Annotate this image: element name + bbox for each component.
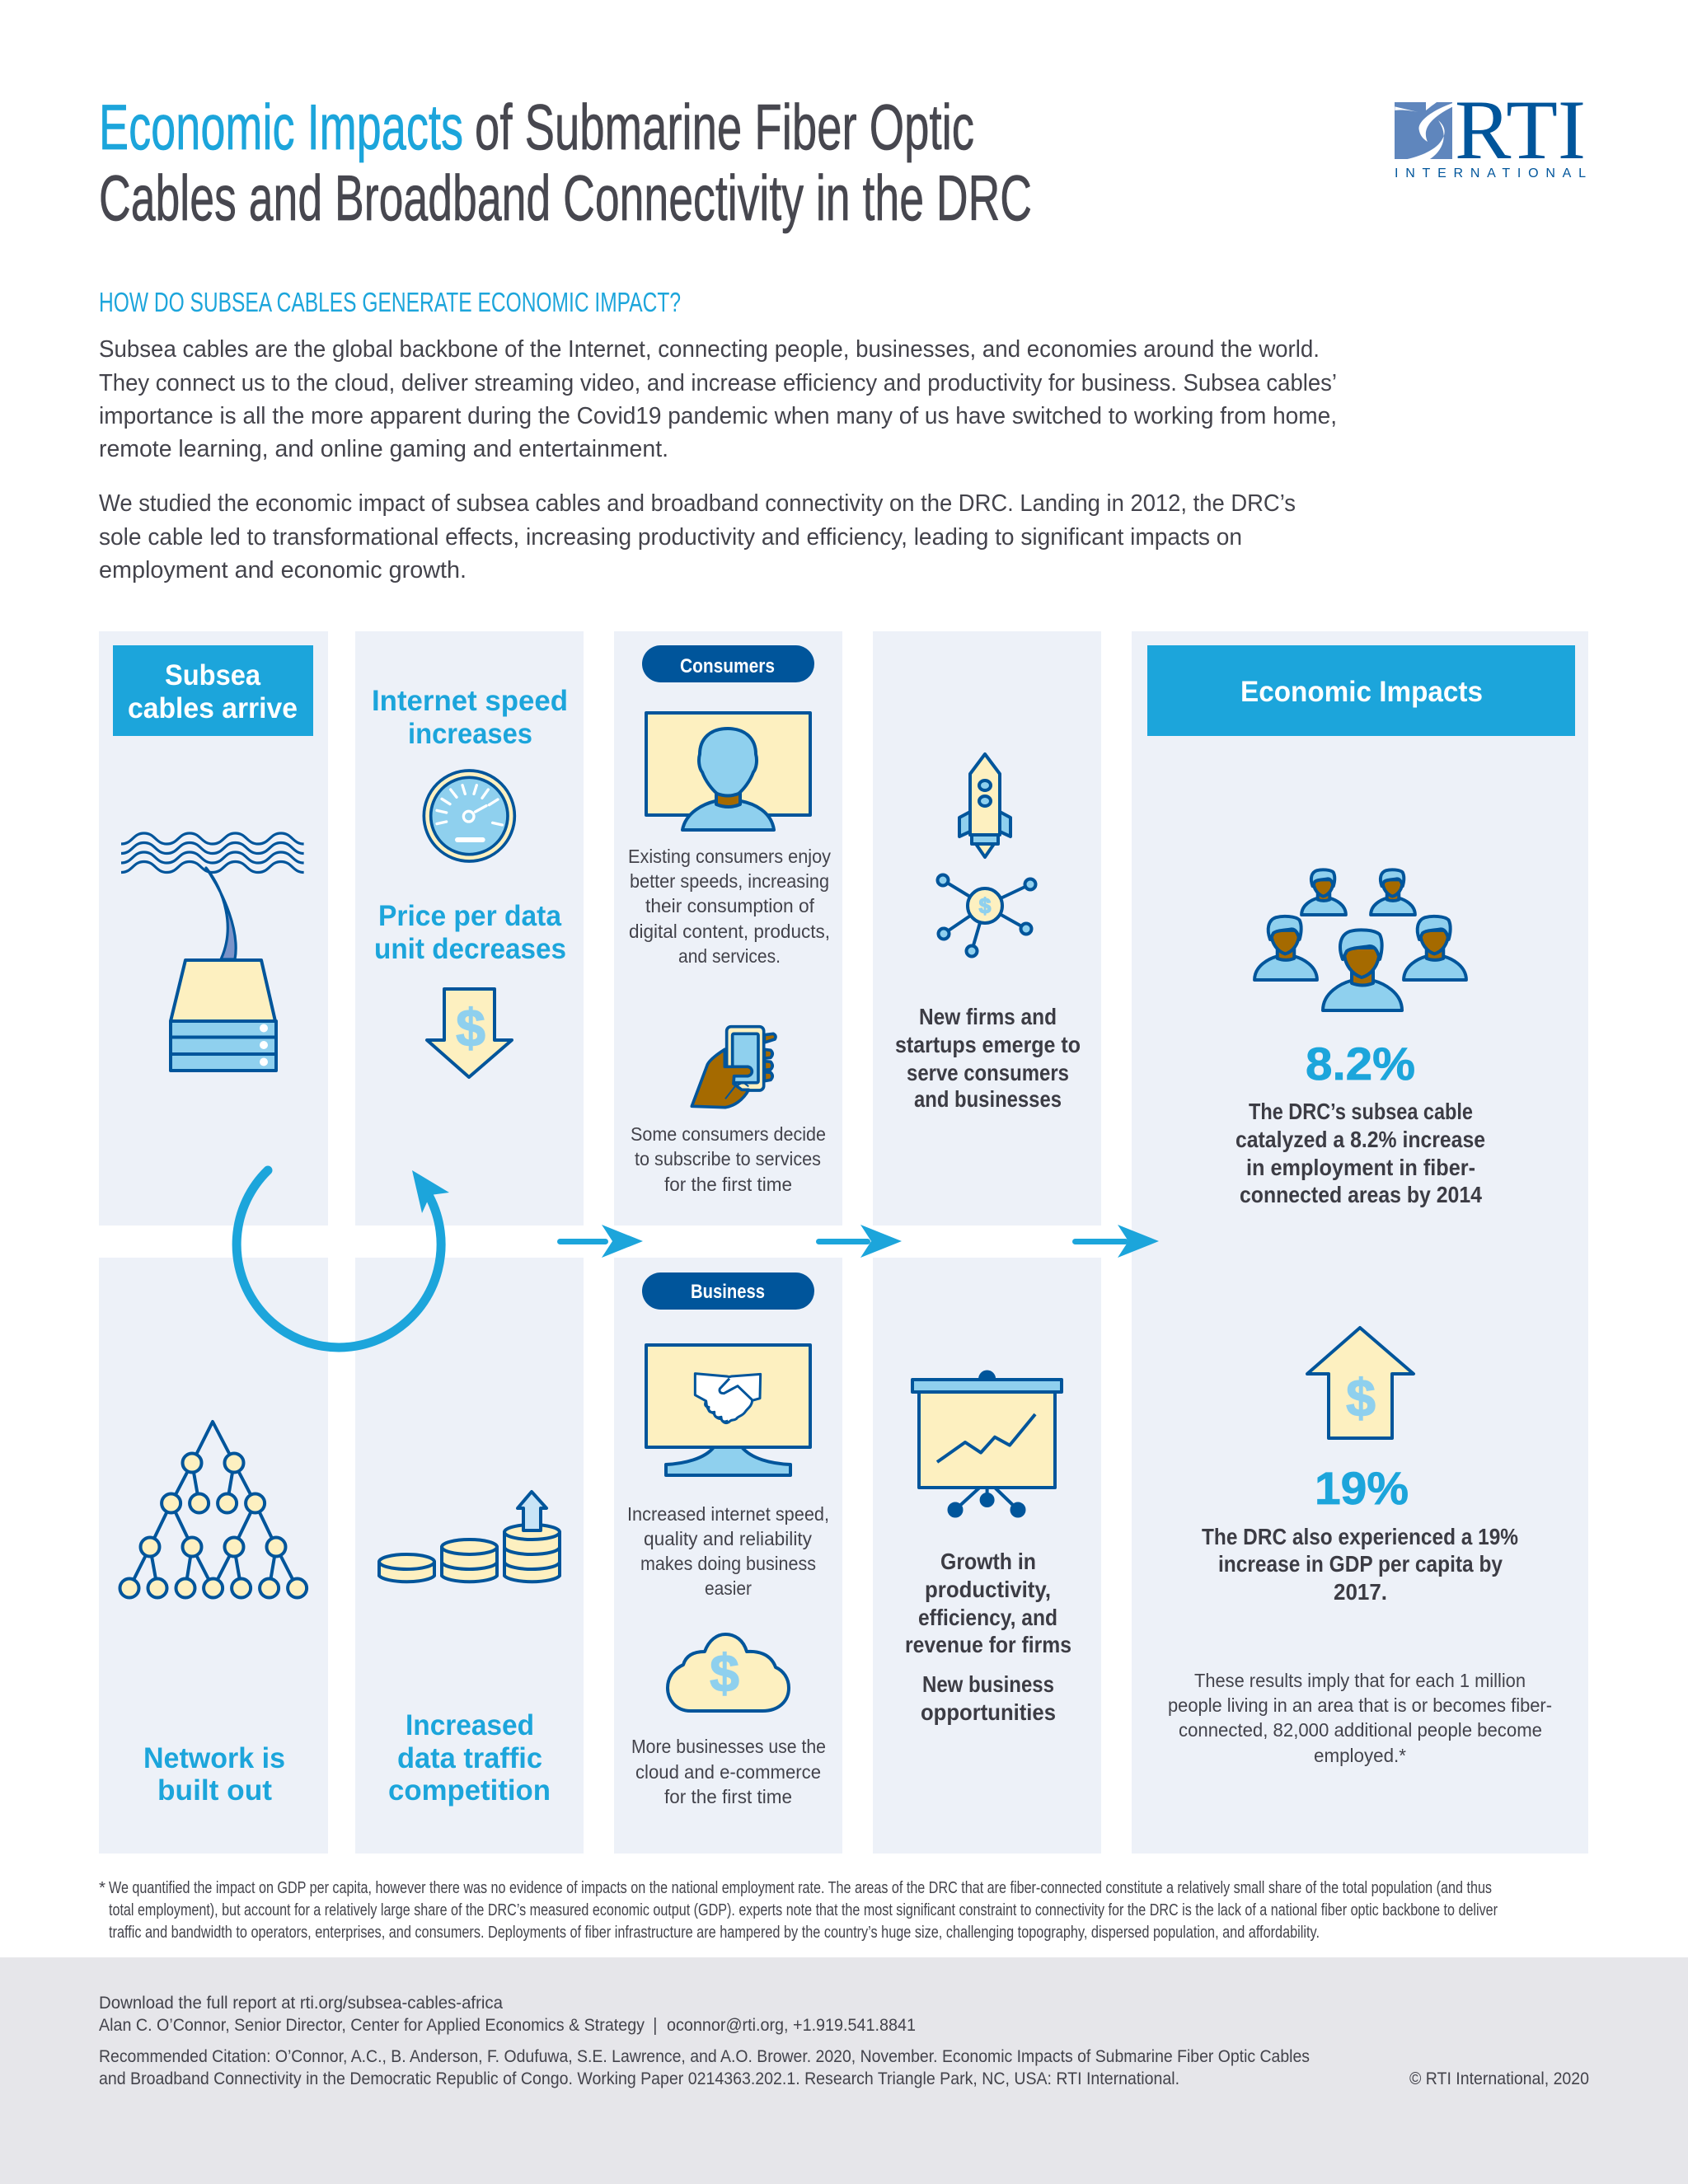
label: price per data unit decreases	[374, 900, 566, 965]
intro paragraph 2: sole cable led to transformational effects, increasing productivity and efficiency, leading to significant impacts on	[99, 524, 1242, 551]
text: implied employment: people living in an area that is or becomes fiber-	[1168, 1694, 1552, 1716]
icon: startup network: $	[979, 893, 992, 918]
panel: internet speed and price	[372, 685, 568, 1077]
intro paragraph 1: They connect us to the cloud, deliver streaming video, and increase efficiency and productivity for business. Subsea cables’	[99, 370, 1337, 396]
text: growth in productivity: productivity,	[925, 1577, 1051, 1602]
icon: ocean waves	[121, 833, 304, 872]
label: price per data unit decreases: Price per data	[378, 900, 562, 932]
text: implied employment	[1168, 1670, 1552, 1766]
header: subsea cables arrive: cables arrive	[128, 692, 298, 724]
icon: cable	[206, 868, 236, 959]
copyright: © RTI International, 2020	[1409, 2069, 1589, 2088]
icon: up arrow with dollar: $	[1346, 1368, 1376, 1427]
panel: consumers	[628, 645, 831, 1195]
contact details: Alan C. O’Connor, Senior Director, Center for Applied Economics & Strategy	[99, 2015, 645, 2035]
text: growth in productivity: efficiency, and	[918, 1605, 1057, 1630]
panel: network is built out	[120, 1422, 307, 1807]
intro paragraph 2: We studied the economic impact of subsea cables and broadband connectivity on the DRC. Landing in 2012, the DRC’s	[99, 490, 1296, 517]
footnote: traffic and bandwidth to operators, enterprises, and consumers. Deployments of fiber infrastructure are hampered by the country’s huge size, challenging topography, dispersed population, and affordability.	[109, 1923, 1320, 1942]
icon: up arrow with dollar	[1307, 1328, 1414, 1438]
text: new subscribers	[631, 1123, 826, 1195]
title: Economic Impacts	[99, 91, 463, 163]
arrow: to economic impacts	[1072, 1225, 1159, 1258]
icon: presentation board with chart	[912, 1371, 1062, 1516]
contact details	[99, 1993, 916, 2035]
text: implied employment: These results imply that for each 1 million	[1194, 1670, 1526, 1691]
text: employment impact	[1236, 1099, 1485, 1207]
arrow: to consumers and business	[557, 1225, 643, 1258]
pill: consumers: Consumers	[680, 655, 775, 677]
text: GDP impact: The DRC also experienced a 19%	[1202, 1524, 1518, 1549]
header: subsea cables arrive	[113, 645, 313, 736]
title: of Submarine Fiber Optic	[475, 91, 974, 163]
text: increased internet speed: quality and reliability	[644, 1528, 812, 1549]
recommended citation	[99, 2046, 1310, 2088]
icon: network tree	[120, 1422, 307, 1597]
text: cloud and e-commerce: More businesses use the	[631, 1736, 826, 1757]
text: growth in productivity: Growth in	[940, 1549, 1036, 1574]
text: new business opportunities: New business	[922, 1671, 1054, 1697]
text: implied employment: employed.*	[1314, 1745, 1406, 1766]
section heading: HOW DO SUBSEA CABLES GENERATE ECONOMIC IMPACT?	[99, 287, 681, 317]
text: new firms and startups: serve consumers	[907, 1060, 1069, 1085]
text: new subscribers: for the first time	[664, 1174, 792, 1195]
header: economic impacts	[1147, 645, 1575, 736]
text: growth in productivity: revenue for firms	[905, 1632, 1071, 1657]
icon: monitor with handshake	[646, 1345, 810, 1475]
text: new firms and startups: startups emerge to	[895, 1032, 1081, 1057]
text: GDP impact	[1202, 1524, 1518, 1605]
text: existing consumers: their consumption of	[645, 895, 814, 916]
logo: RTI International: RTI	[1455, 83, 1586, 177]
intro paragraph 1	[99, 336, 1337, 462]
panel: increased data traffic	[379, 1492, 560, 1807]
text: cloud and e-commerce: for the first time	[664, 1786, 792, 1807]
label: price per data unit decreases: unit decreases	[374, 933, 566, 965]
title	[99, 91, 1032, 234]
label: increased data traffic competition: data traffic	[397, 1742, 542, 1774]
icon: rocket	[959, 754, 1010, 857]
pill: business: Business	[691, 1281, 765, 1303]
text: new subscribers: to subscribe to services	[635, 1148, 821, 1169]
icon: startup network	[938, 875, 1035, 956]
intro paragraph 2	[99, 490, 1296, 583]
label: network is built out: Network is	[143, 1742, 285, 1774]
panel: economic impacts	[1147, 645, 1575, 1766]
pill: business	[642, 1272, 814, 1310]
label: internet speed increases: Internet speed	[372, 685, 568, 717]
arrow: feedback loop	[237, 1170, 449, 1347]
contact details: oconnor@rti.org, +1.919.541.8841	[667, 2015, 916, 2035]
text: existing consumers: better speeds, increasing	[630, 870, 829, 892]
panel: new firms	[895, 754, 1081, 1112]
text: cloud and e-commerce	[631, 1736, 826, 1807]
footnote: *	[99, 1878, 106, 1897]
recommended citation: Recommended Citation: O’Connor, A.C., B. Anderson, F. Odufuwa, S.E. Lawrence, and A.O. Brower. 2020, November. Economic Impacts of Submarine Fiber Optic Cables	[99, 2046, 1310, 2066]
icon: down arrow with dollar: $	[456, 998, 485, 1057]
stat: 8.2%: 8.2%	[1306, 1038, 1415, 1090]
text: GDP impact: 2017.	[1334, 1579, 1387, 1605]
title: Cables and Broadband Connectivity in the DRC	[99, 162, 1032, 234]
icon: group of people	[1254, 869, 1466, 1010]
label: increased data traffic competition	[388, 1709, 551, 1807]
footnote	[99, 1878, 1498, 1942]
label: network is built out: built out	[157, 1774, 272, 1807]
intro paragraph 1: Subsea cables are the global backbone of the Internet, connecting people, businesses, and economies around the world.	[99, 336, 1320, 363]
text: increased internet speed: makes doing business	[640, 1553, 816, 1574]
icon: speedometer	[424, 771, 514, 861]
header: subsea cables arrive: Subsea	[165, 659, 260, 691]
text: employment impact: connected areas by 2014	[1240, 1182, 1483, 1207]
icon: growing coin stacks	[379, 1492, 560, 1582]
label: increased data traffic competition: competition	[388, 1774, 551, 1807]
stat: 19%: 19%	[1315, 1462, 1409, 1514]
pill: consumers	[642, 645, 814, 682]
text: employment impact: The DRC’s subsea cable	[1249, 1099, 1473, 1124]
label: network is built out	[143, 1742, 285, 1807]
icon: person on screen	[646, 713, 810, 830]
logo: RTI International: INTERNATIONAL	[1395, 166, 1586, 180]
arrow: to new firms and growth	[816, 1225, 902, 1258]
text: GDP impact: increase in GDP per capita by	[1218, 1551, 1503, 1577]
recommended citation: and Broadband Connectivity in the Democratic Republic of Congo. Working Paper 0214363.202.1. Research Triangle Park, NC, USA: RTI International.	[99, 2069, 1179, 2088]
text: existing consumers	[628, 846, 831, 967]
icon: cloud with dollar: $	[710, 1643, 739, 1703]
icon: hand holding phone	[692, 1027, 776, 1108]
label: increased data traffic competition: Increased	[406, 1709, 534, 1741]
text: increased internet speed: Increased internet speed,	[627, 1503, 829, 1525]
text: employment impact: catalyzed a 8.2% increase	[1236, 1127, 1485, 1152]
text: new business opportunities	[921, 1671, 1056, 1725]
contact details: Download the full report at rti.org/subsea-cables-africa	[99, 1993, 503, 2013]
text: cloud and e-commerce: cloud and e-commerce	[635, 1761, 821, 1783]
text: new subscribers: Some consumers decide	[631, 1123, 826, 1145]
label: internet speed increases: increases	[408, 718, 532, 750]
icon: server	[171, 960, 276, 1071]
text: increased internet speed	[627, 1503, 829, 1599]
panel: subsea cables arrive	[113, 645, 313, 1071]
text: implied employment: connected, 82,000 additional people become	[1179, 1719, 1542, 1741]
icon: cloud with dollar	[668, 1634, 789, 1711]
logo: RTI International	[1395, 83, 1586, 180]
text: new firms and startups	[895, 1004, 1081, 1112]
text: employment impact: in employment in fiber-	[1246, 1155, 1475, 1180]
footer band	[0, 1957, 1688, 2184]
text: new business opportunities: opportunities	[921, 1699, 1056, 1725]
text: existing consumers: digital content, products,	[629, 921, 830, 942]
text: increased internet speed: easier	[705, 1577, 752, 1599]
text: new firms and startups: New firms and	[919, 1004, 1057, 1029]
text: new firms and startups: and businesses	[914, 1086, 1062, 1112]
panels background	[99, 631, 1588, 1854]
panel: growth in productivity	[905, 1371, 1071, 1725]
intro paragraph 2: employment and economic growth.	[99, 557, 467, 583]
intro paragraph 1: remote learning, and online gaming and entertainment.	[99, 436, 668, 462]
text: existing consumers: Existing consumers enjoy	[628, 846, 831, 867]
intro paragraph 1: importance is all the more apparent during the Covid19 pandemic when many of us have switched to working from home,	[99, 403, 1337, 429]
label: internet speed increases	[372, 685, 568, 750]
header: economic impacts: Economic Impacts	[1240, 676, 1483, 708]
icon: down arrow with dollar	[427, 989, 512, 1077]
text: growth in productivity	[905, 1549, 1071, 1657]
text: existing consumers: and services.	[678, 945, 781, 967]
panel: business	[627, 1272, 829, 1807]
